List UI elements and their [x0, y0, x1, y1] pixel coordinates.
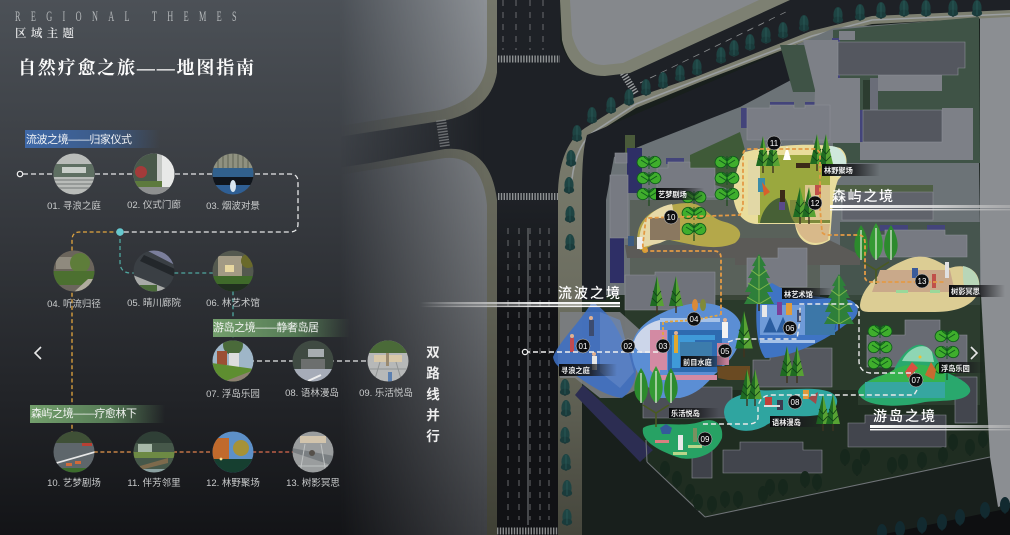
- route line: teal branch: [120, 232, 233, 340]
- number badges: 07: [912, 376, 921, 385]
- number badges: 12: [811, 199, 820, 208]
- route: islands: [700, 390, 917, 424]
- birch trees: [634, 223, 898, 427]
- header english: REGIONAL THEMES: [15, 7, 237, 25]
- sidewalk strip: [558, 10, 1010, 535]
- photo captions: 03. 烟波对景: [206, 200, 260, 212]
- photo captions: 10. 艺梦剧场: [47, 478, 101, 489]
- photo 08: [292, 340, 334, 382]
- photo captions: 06. 林艺术馆: [206, 297, 260, 309]
- blob: zone 09: [643, 420, 722, 459]
- photo 10: [53, 431, 95, 473]
- photo captions: 12. 林野聚场: [206, 477, 260, 489]
- photo 01: [53, 153, 95, 195]
- zone title: senyu: 森屿之境: [832, 188, 893, 204]
- route: forest orange: [643, 149, 945, 315]
- route: teal link: [728, 304, 915, 373]
- icon: junction node: [116, 228, 124, 236]
- side note: 路: [426, 366, 440, 381]
- blob: zone 01 02: [553, 302, 640, 398]
- route line: orange branch: [72, 232, 120, 432]
- conifers: [650, 134, 840, 431]
- photo 04: [53, 250, 95, 292]
- round leaf trees: [635, 154, 961, 380]
- icon: map route start: [522, 349, 528, 355]
- header chinese: 区域主题: [15, 26, 74, 40]
- upper middle block: [560, 0, 790, 76]
- number badges: 01: [579, 342, 588, 351]
- route: water: [663, 315, 720, 345]
- tag: water zone: 流波之境——归家仪式: [26, 132, 132, 146]
- number badges: [576, 136, 929, 446]
- number badges: 10: [667, 213, 676, 222]
- photo 02: [133, 153, 175, 195]
- photo captions: 05. 晴川廊院: [127, 297, 181, 309]
- lawn areas: [625, 17, 980, 405]
- perimeter lines: [646, 440, 990, 517]
- map node labels: 乐活悦岛: [671, 409, 700, 418]
- road network: [441, 0, 1010, 535]
- icon: start node: [17, 171, 23, 177]
- number badges: 03: [659, 342, 668, 351]
- photo 09: [367, 340, 409, 382]
- dark garden trees: [660, 431, 1010, 535]
- blob: zone 07: [858, 345, 970, 406]
- blob: zone 06: [756, 283, 858, 358]
- map node labels: 林野聚场: [824, 166, 853, 175]
- blob: zone 10: [637, 203, 740, 250]
- number badges: 08: [791, 398, 800, 407]
- number badges: 05: [721, 347, 730, 356]
- tag: island zone: 游岛之境——静奢岛居: [213, 320, 319, 334]
- photo 11: [133, 431, 175, 473]
- blob: central water court: [632, 303, 750, 398]
- zone title: senyu: [830, 188, 1010, 210]
- photo captions: 01. 寻浪之庭: [47, 200, 101, 212]
- number badges: 13: [918, 277, 927, 286]
- title: 自然疗愈之旅——地图指南: [18, 57, 254, 78]
- map node labels: 寻浪之庭: [561, 366, 591, 375]
- blob: zone 08: [724, 389, 837, 431]
- firs: [744, 254, 854, 331]
- tag: forest zone: [30, 405, 165, 423]
- purple building shadows: [575, 38, 945, 462]
- map node labels: 前目水庭: [683, 358, 713, 367]
- map node labels: 语林漫岛: [772, 418, 801, 427]
- photo captions: 11. 伴芳邻里: [127, 477, 181, 489]
- photo captions: 07. 浮岛乐园: [206, 388, 260, 400]
- map node labels: 林艺术馆: [784, 290, 813, 299]
- tag: water zone: [25, 130, 160, 148]
- number badges: 09: [701, 435, 710, 444]
- route line: first path: [23, 174, 298, 232]
- number badges: 02: [624, 342, 633, 351]
- dark plaza: [582, 50, 791, 300]
- photo 07: [212, 340, 254, 382]
- photo 13: [292, 431, 334, 473]
- side note: 行: [426, 429, 440, 444]
- map node labels: 浮岛乐园: [941, 364, 970, 373]
- route line: forest path: [74, 451, 313, 453]
- zone blobs: [553, 145, 979, 459]
- map node labels: 艺梦剧场: [658, 190, 687, 199]
- photo captions: 02. 仪式门廊: [127, 199, 181, 211]
- zone title: youdao: [870, 408, 1010, 430]
- photo captions: 08. 语林漫岛: [285, 387, 339, 399]
- lower road corner: [880, 508, 1010, 535]
- icon: previous arrow: [35, 347, 41, 359]
- map node labels: [559, 164, 1005, 427]
- buildings: [610, 31, 977, 478]
- site ground: [582, 18, 981, 300]
- route diagram: [17, 171, 388, 452]
- route line: island path: [233, 360, 388, 362]
- photo 06: [212, 250, 255, 292]
- photo captions: 09. 乐活悦岛: [359, 387, 413, 399]
- icon: next arrow: [971, 347, 977, 359]
- number badges: 06: [786, 324, 795, 333]
- zone title: youdao: 游岛之境: [873, 408, 935, 424]
- street trees: [560, 0, 982, 526]
- map people: [570, 146, 949, 455]
- tag: forest zone: 森屿之境——疗愈林下: [31, 406, 137, 420]
- photo captions: [47, 199, 413, 489]
- photo captions: 13. 树影冥思: [286, 477, 340, 489]
- zone title: liubo: 流波之境: [558, 285, 620, 301]
- route: water white start: [525, 351, 664, 353]
- photo 03: [212, 153, 254, 195]
- photo captions: 04. 听流归径: [47, 298, 101, 310]
- tag: island zone: [213, 319, 350, 337]
- side note: 双: [426, 345, 440, 360]
- side note: 线: [426, 386, 440, 402]
- number badges: 11: [770, 139, 779, 148]
- map routes: [525, 149, 945, 424]
- map trees: [634, 134, 961, 431]
- map node labels: 树影冥思: [951, 287, 980, 296]
- side note: 并: [426, 407, 440, 423]
- number badges: 04: [690, 315, 699, 324]
- blob: zone 13: [860, 257, 979, 312]
- photo 05: [133, 250, 175, 292]
- blob: zone 11 12: [733, 145, 847, 245]
- photo 12: [212, 431, 254, 473]
- left dark panel: [0, 0, 510, 535]
- side note: [426, 345, 440, 444]
